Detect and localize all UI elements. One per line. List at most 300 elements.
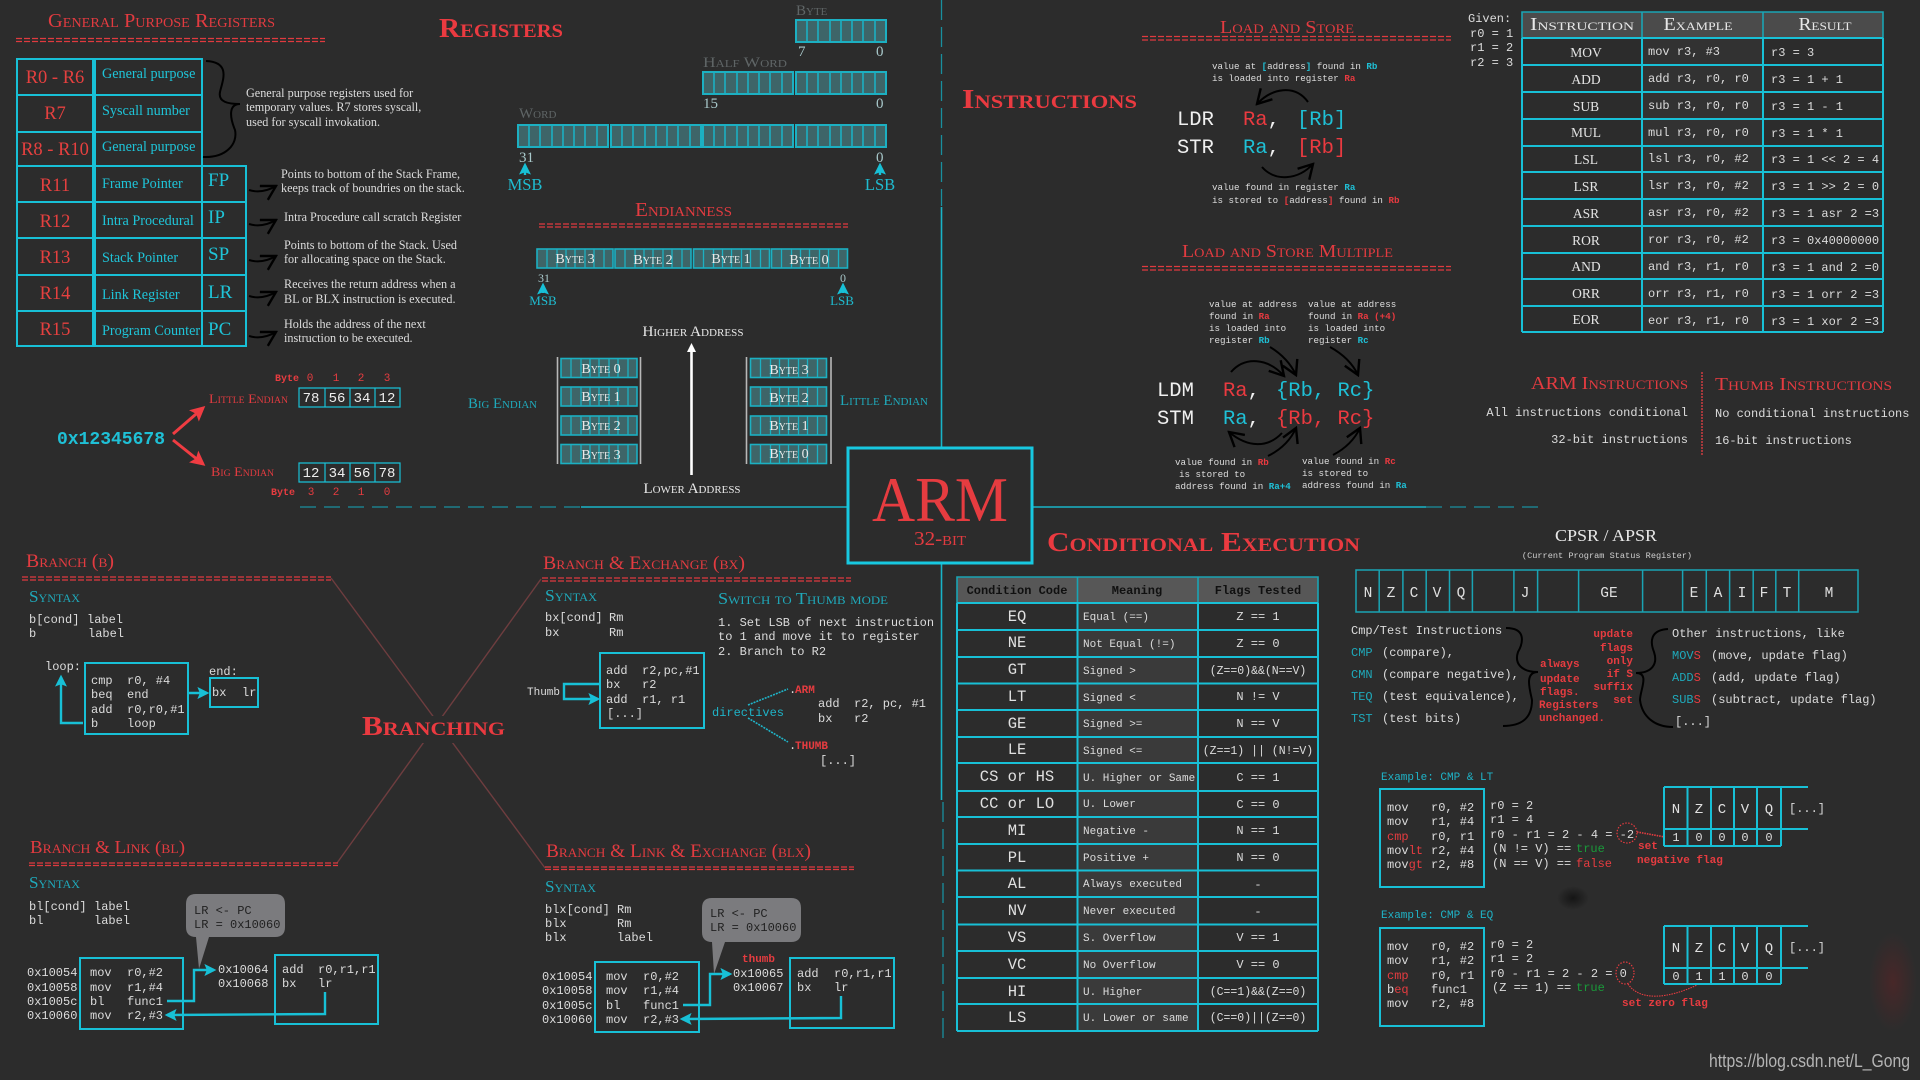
title: registers: Registers [439,13,563,43]
code block: loop: add [91,703,113,717]
LDR and STR syntax: Ra [1243,109,1268,132]
code block: loop: loop [127,717,156,731]
register table: IP [208,207,225,228]
flag grid: 0 [1672,970,1680,984]
flag grid: C [1718,802,1726,818]
byte order row [529,249,854,308]
notes: LDM: is loaded into [1308,323,1385,334]
directives: [...] [820,754,856,768]
meanings: Positive + [1083,853,1149,865]
register table: General purpose [102,66,195,82]
calculation: r0 - r1 = 2 - 4 = -2 [1490,828,1634,842]
condition codes: NE [1008,634,1026,652]
big endian bytes: 56 [354,466,370,482]
caller code: func1 [127,995,163,1009]
table header: Example [1664,14,1732,34]
function code [218,955,378,1024]
flag grid: Z [1695,941,1703,957]
flags tested: N == 1 [1236,824,1280,838]
calculation: r1 = 4 [1490,813,1533,827]
flag grid: [...] [1789,802,1825,816]
caller code: r2,#3 [643,1013,679,1027]
instruction names: ASR [1573,206,1599,221]
callout [186,894,285,969]
other instructions list: (add, update flag) [1711,671,1841,685]
status register bits: Z [1387,586,1396,602]
byte order row: Byte 3 [555,252,595,267]
condition codes: MI [1008,822,1026,840]
meanings: Signed > [1083,666,1136,678]
other instructions list: (move, update flag) [1711,649,1848,663]
half word: Half Word [703,55,787,71]
code block: end: bx [212,686,226,700]
code block: end [189,665,258,707]
cmp and test list: Cmp/Test Instructions [1351,624,1502,638]
thumb function code: add [797,967,819,981]
condition codes: NV [1008,902,1027,920]
directives: THUMB [795,741,828,753]
little endian stack: Byte 1 [769,419,809,434]
instruction names: ORR [1572,286,1600,301]
highlight circle [1616,962,1697,996]
flags tested: - [1254,905,1262,919]
flags tested: Z == 0 [1236,637,1280,651]
instruction results: r3 = 1 << 2 = 4 [1771,153,1879,167]
syntax: label [94,900,130,914]
byte order row: Byte 0 [789,253,829,268]
big endian stack: Byte 1 [581,390,621,405]
byte [796,3,886,60]
syntax: blx [545,917,567,931]
syntax [29,587,124,641]
directives: bx [818,712,832,726]
notes: STM: value found in Rb [1175,457,1269,468]
condition codes: LE [1008,741,1026,759]
code block: cmp [1387,969,1409,983]
flag grid: 1 [1695,970,1703,984]
arrows [173,408,203,464]
LDR and STR syntax: [Rb] [1297,109,1346,132]
register table: Syscall number [102,103,190,119]
byte: 0 [876,44,884,60]
note: update flags only if S suffix set: suffix [1593,682,1633,694]
thumb function code: thumb [742,954,775,966]
code block: r0, #2 [1431,801,1474,815]
table header: Result [1798,14,1852,34]
directives: . [789,683,796,697]
code block: mov [1387,940,1409,954]
heading: Branch (b) [26,551,114,572]
little endian bytes: Byte [275,374,299,385]
instruction names: AND [1571,259,1601,274]
caller code: 0x1005c [27,995,77,1009]
code block [527,653,704,728]
panel: branch and exchange [527,553,934,768]
syntax: Rm [609,626,623,640]
table header: Condition Code [967,584,1067,598]
instruction examples: add r3, r0, r0 [1648,72,1749,86]
title: instructions: Instructions [962,84,1137,114]
notes: STM: is stored to [1302,468,1368,479]
register table: R15 [40,320,70,340]
directives [712,683,926,768]
heading: Example: CMP & LT [1381,772,1494,784]
thumb function code [733,954,894,1028]
caller code: r2,#3 [127,1009,163,1023]
cmp and test list: CMP [1351,646,1373,660]
syntax: Syntax [545,586,597,605]
register table [17,59,246,346]
LDM and STM syntax: LDM [1157,380,1194,403]
LDR and STR syntax: Ra [1243,137,1268,160]
calculation: r0 = 2 [1490,799,1533,813]
calculation: true [1576,981,1605,995]
meanings: Not Equal (!=) [1083,639,1175,651]
note: STR: value found in register Ra [1212,182,1355,193]
thumb function code: r0,r1,r1 [834,967,892,981]
branching cross lines [331,578,545,868]
note: always update flags: Registers [1539,700,1598,712]
code block: loop: b [91,717,98,731]
call and return arrows [682,974,841,1019]
panel: example CMP and LT [1380,772,1825,887]
flags tested [1203,610,1313,1025]
table header: Flags Tested [1215,584,1301,598]
flags tested: (C==1)&&(Z==0) [1210,986,1306,999]
thumb instructions: 16-bit instructions [1715,434,1852,448]
heading: Load and Store Multiple [1182,241,1393,261]
meanings: Signed < [1083,693,1136,705]
flags tested: (Z==1) || (N!=V) [1203,745,1313,758]
syntax: b [29,627,36,641]
code block: r2,pc,#1 [642,664,700,678]
caller code: r1,#4 [127,981,163,995]
word: 0 [876,150,884,166]
code block: end: end: [209,665,238,679]
LDM and STM syntax [1157,380,1374,431]
code block: b [1387,983,1394,997]
instruction examples: mul r3, r0, r0 [1648,126,1749,140]
caller code: bl [606,999,620,1013]
code block: lt [1409,844,1423,858]
instruction names: ROR [1572,233,1600,248]
little endian stack: Little Endian [840,393,928,409]
register table: Frame Pointer [102,176,183,192]
cmp and test list: (compare negative), [1382,668,1519,682]
instruction examples: lsr r3, r0, #2 [1648,179,1749,193]
meanings: Signed <= [1083,746,1142,758]
meanings: Negative - [1083,826,1149,838]
calculation: true [1576,842,1605,856]
meanings: U. Higher [1083,987,1142,999]
caller code: 0x1005c [542,999,592,1013]
status register bits: T [1783,586,1792,602]
callout: LR = 0x10060 [194,918,280,932]
register table: R12 [40,212,70,232]
byte order row: 0 [840,271,846,285]
panel: load and store [1142,17,1451,206]
note: always update flags: update [1540,674,1580,686]
code block: r0, #2 [1431,940,1474,954]
other instructions list: MOV [1672,649,1694,663]
code block [1380,928,1484,1026]
title: conditional execution: Conditional Execution [1047,527,1360,557]
register table: SP [208,244,229,265]
table header [1530,14,1852,34]
code block: loop: r0, #4 [127,674,170,688]
condition codes: VC [1008,956,1026,974]
flag grid: [...] [1789,941,1825,955]
code block: r2 [642,678,656,692]
instruction names: SUB [1573,99,1599,114]
half word: 0 [876,96,884,112]
instruction table [1522,12,1883,332]
table header: Instruction [1530,14,1634,34]
panel: endianness [468,199,928,497]
big endian bytes: 78 [379,466,395,482]
heading: Branch & Exchange (bx) [543,553,745,574]
status register bits: GE [1600,586,1618,602]
condition codes: GT [1008,661,1026,679]
ARM title box: ARM [872,465,1008,535]
syntax [545,586,623,640]
switch to thumb mode: 2. Branch to R2 [718,645,826,659]
flags tested: (C==0)||(Z==0) [1210,1012,1306,1025]
instruction names: LSL [1574,152,1598,167]
syntax: bl [29,914,43,928]
thumb function code: 0x10065 [733,967,783,981]
callout: LR = 0x10060 [710,921,796,935]
code block: mov [1387,844,1409,858]
notes: STM: address found in Ra [1302,480,1407,491]
flag note: set zero flag [1622,998,1708,1010]
notes: LDM: register Rb [1209,335,1270,346]
condition codes: CC or LO [980,795,1054,813]
instruction examples: asr r3, r0, #2 [1648,206,1749,220]
LDR and STR syntax: , [1268,109,1280,132]
instruction results: r3 = 1 and 2 =0 [1771,261,1879,275]
flags tested: C == 1 [1236,771,1280,785]
flags tested: Z == 1 [1236,610,1280,624]
caller code [542,962,699,1032]
code block: r1, #2 [1431,954,1474,968]
flag grid: 0 [1765,831,1773,845]
given values: Given: [1468,12,1511,26]
register table: R11 [40,176,70,196]
instruction examples: orr r3, r1, r0 [1648,287,1749,301]
little endian bytes [209,373,400,407]
register table: R0 - R6 [26,68,84,88]
register table: Intra Procedural [102,213,194,229]
caller code: 0x10060 [542,1013,592,1027]
status register bits: J [1521,586,1529,602]
caller code: mov [90,1009,112,1023]
code block: loop: beq [91,688,113,702]
condition codes: LS [1008,1009,1026,1027]
note: update flags only if S suffix set: update [1593,629,1633,641]
ARM instructions: ARM Instructions [1531,373,1688,393]
condition codes: HI [1008,983,1026,1001]
code block: mov [1387,997,1409,1011]
notes: LDM: is loaded into [1209,323,1286,334]
calculation: r1 = 2 [1490,952,1533,966]
syntax: Syntax [29,873,80,892]
note: STR: is stored to [address] found in Rb [1212,195,1400,206]
big endian stack: Byte 2 [581,419,621,434]
notes: special registers: Receives the return address when a [284,277,456,291]
caller code: mov [90,966,112,980]
calculation: (N != V) == [1492,842,1571,856]
LDM and STM syntax: Ra [1223,380,1248,403]
thumb function code: lr [834,981,848,995]
caller code: mov [90,981,112,995]
code block: [...] [607,707,643,721]
caller code: mov [606,970,628,984]
code block: loop: cmp [91,674,113,688]
little endian bytes: 56 [329,391,345,407]
thumb instructions: Thumb Instructions [1715,374,1892,394]
condition codes: PL [1008,849,1026,867]
flag grid: V [1741,941,1750,957]
function code: add [282,963,304,977]
syntax: label [87,613,123,627]
thumb function code: bx [797,981,811,995]
LDM and STM syntax: {Rb, Rc} [1276,380,1374,403]
note: update flags only if S suffix set: set [1613,695,1633,707]
flags tested: N != V [1236,690,1280,704]
flags tested: - [1254,878,1262,892]
caller code: mov [606,1013,628,1027]
condition code table [957,577,1318,1031]
register table: LR [208,282,233,303]
flags tested: V == 0 [1236,958,1280,972]
big endian bytes: 12 [303,466,319,482]
syntax: label [617,931,653,945]
flag grid: N [1672,941,1680,957]
big endian stack: Byte 3 [581,448,621,463]
word: 31 [519,150,534,166]
flags tested: V == 1 [1236,931,1280,945]
other instructions list: Other instructions, like [1672,627,1845,641]
given values: r1 = 2 [1470,41,1513,55]
instruction results: r3 = 1 + 1 [1771,73,1843,87]
little endian bytes: 34 [354,391,370,407]
instruction examples: lsl r3, r0, #2 [1648,152,1749,166]
caller code [27,958,183,1029]
arrows [1229,347,1360,456]
flag grid: Q [1765,941,1773,957]
word: Word [519,106,556,122]
little endian bytes: Little Endian [209,391,289,406]
brace: cmp group [1503,628,1538,726]
syntax [29,873,130,928]
notes: special registers: for allocating space on the Stack. [284,252,446,266]
notes: LDM: value at address [1209,299,1297,310]
other instructions list: SUB [1672,693,1694,707]
code block: add [606,664,628,678]
condition codes [980,608,1054,1027]
cmp and test list: TEQ [1351,690,1373,704]
syntax: blx[cond] [545,903,610,917]
arrows [1257,90,1313,177]
code block: r0, r1 [1431,830,1474,844]
note: general purpose: General purpose registers used for [246,86,413,100]
instruction names [1570,45,1602,327]
byte order row: MSB [529,293,557,308]
little endian stack: Byte 3 [769,363,809,378]
meanings: Equal (==) [1083,612,1149,624]
syntax: label [94,914,130,928]
byte order row: LSB [830,293,854,308]
status register bits: N [1364,586,1372,602]
notes: STM: address found in Ra+4 [1175,481,1291,492]
code block: cmp [1387,830,1409,844]
directives: r2 [854,712,868,726]
syntax: Rm [617,917,631,931]
thumb function code: 0x10067 [733,981,783,995]
syntax: Syntax [545,877,596,896]
syntax: bl[cond] [29,900,87,914]
notes: special registers: Points to bottom of the Stack Frame, [281,167,460,181]
note: general purpose: used for syscall invokation. [246,115,380,129]
little endian stack: Byte 2 [769,391,809,406]
flag note: set [1638,841,1658,853]
condition codes: EQ [1008,608,1026,626]
instruction names: ADD [1571,72,1601,87]
flag grid: N [1672,802,1680,818]
code block: Thumb [527,687,560,699]
notes: LDM: found in Ra (+4) [1308,311,1396,322]
status register bits [1356,570,1858,612]
function code: bx [282,977,296,991]
flag grid: C [1718,941,1726,957]
calculation: false [1576,857,1612,871]
directives: add [818,697,840,711]
syntax: blx [545,931,567,945]
MSB and LSB markers: LSB [865,175,895,194]
title: branching: Branching [362,711,505,741]
function code: r0,r1,r1 [318,963,376,977]
register table: Program Counter [102,323,200,339]
thumb instructions: No conditional instructions [1715,407,1909,421]
syntax: bx [545,626,559,640]
heading: endianness: Endianness [635,199,732,221]
half word [703,55,886,112]
panel: general purpose registers [16,10,465,346]
code block: loop: loop: [45,660,81,674]
heading: Load and Store [1220,17,1354,37]
register table: R14 [40,284,70,304]
big endian bytes: 34 [329,466,345,482]
other instructions list: [...] [1675,715,1711,729]
register table: R7 [44,104,66,124]
code block: eq [1394,983,1409,997]
note: general purpose: temporary values. R7 stores syscall, [246,100,421,114]
condition codes: VS [1008,929,1026,947]
flag grid: 0 [1718,831,1726,845]
other instructions list: S [1694,693,1701,707]
heading: Branch & Link & Exchange (blx) [546,841,811,862]
panel: branch link exchange [542,841,894,1032]
directives: . [789,739,796,753]
LDM and STM syntax: , [1248,380,1260,403]
panel: CPSR [1351,526,1877,729]
switch to thumb mode: to 1 and move it to register [718,630,920,644]
code block: r1, #4 [1431,815,1474,829]
caller code: 0x10054 [27,966,77,980]
word [518,106,886,166]
flag grid: 0 [1741,831,1749,845]
